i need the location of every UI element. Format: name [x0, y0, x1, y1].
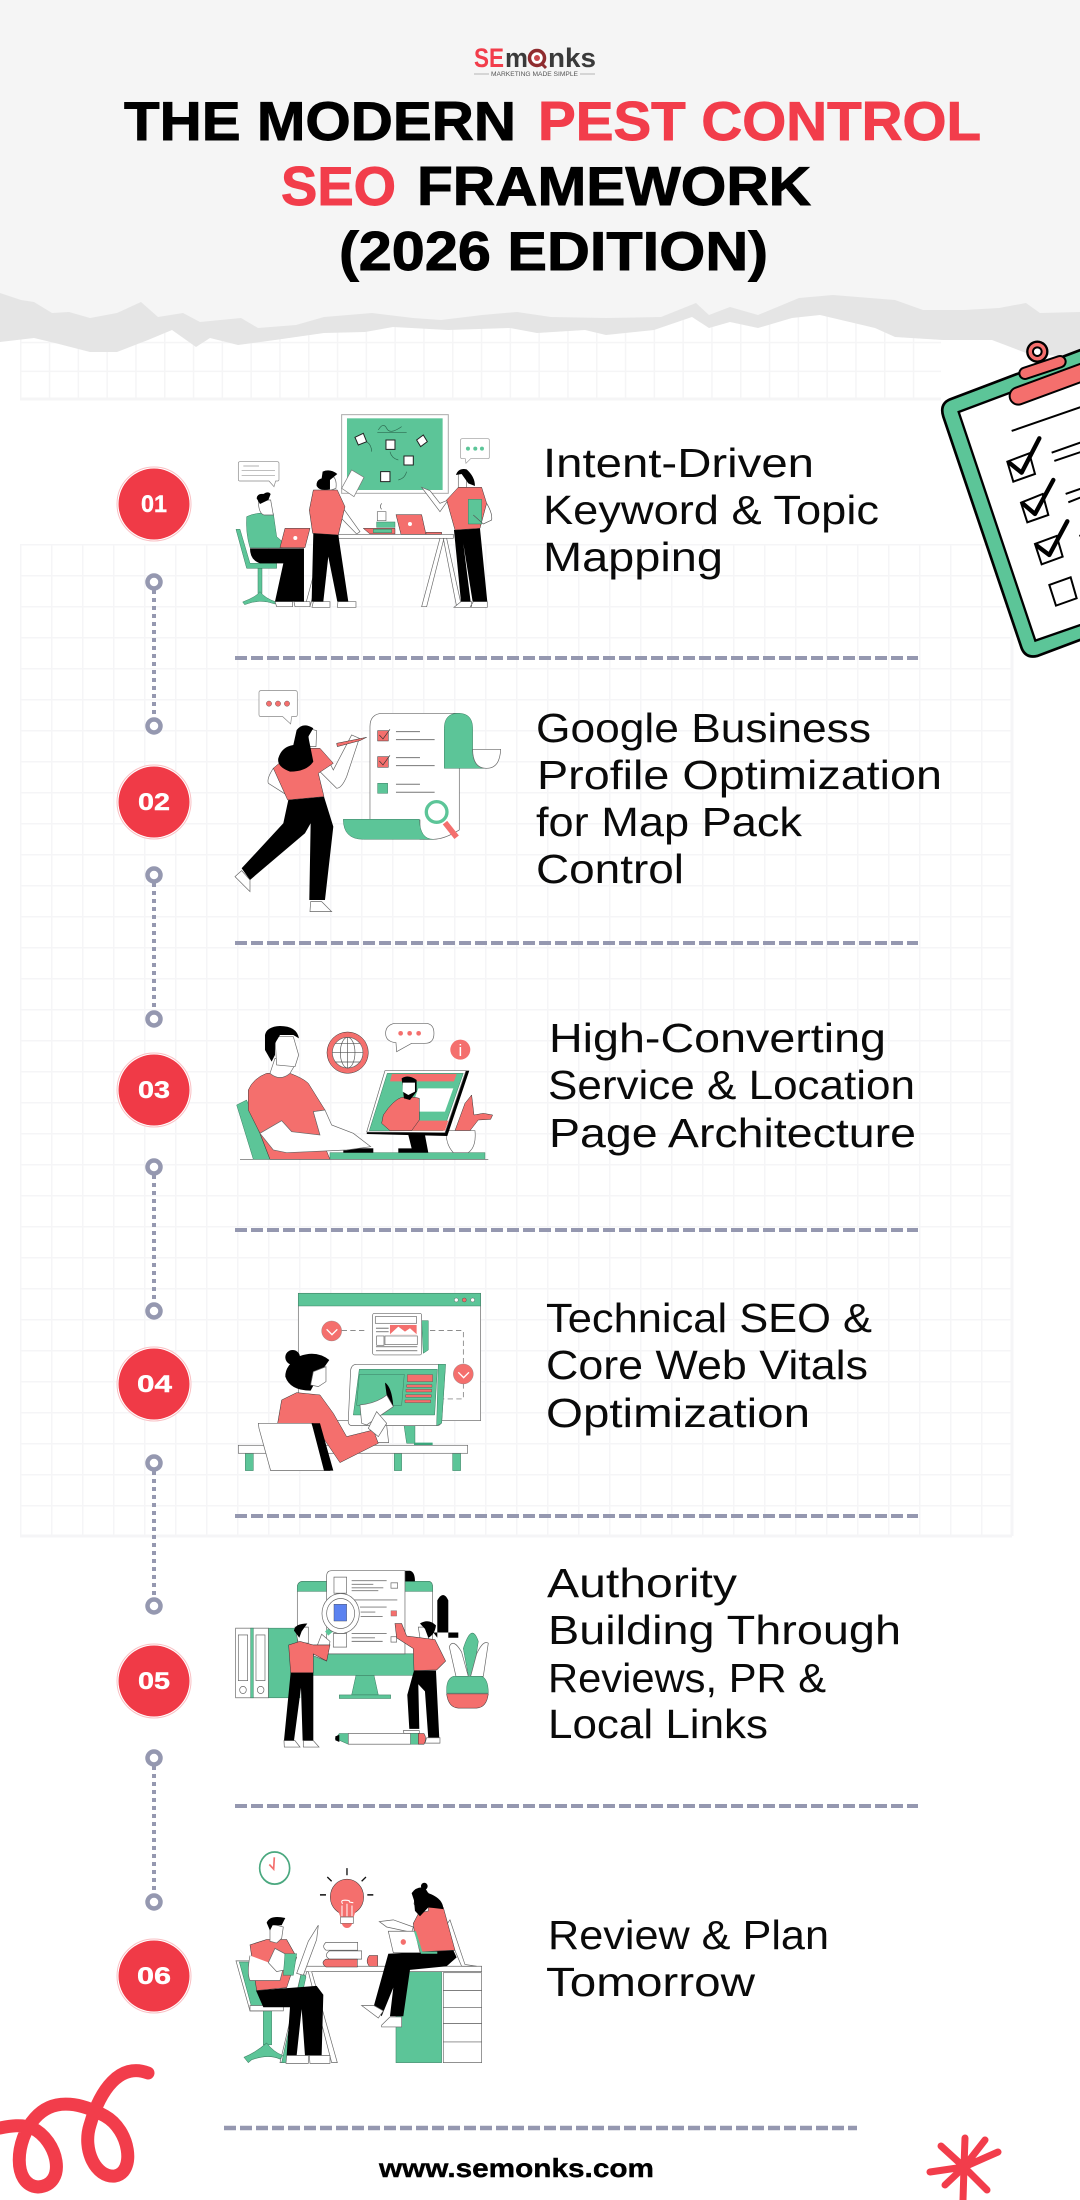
monitor — [367, 1071, 469, 1153]
badge 01: 01 — [141, 491, 167, 518]
illustration 3: man on video call — [237, 1023, 493, 1159]
text block 4: Core Web Vitals — [546, 1342, 868, 1388]
badge 03 — [117, 1053, 191, 1127]
speech bubble — [386, 1023, 434, 1052]
text block 1: Intent-Driven — [543, 440, 814, 486]
text block 3 — [548, 1015, 916, 1156]
man — [284, 1624, 330, 1747]
text block 5 — [547, 1560, 901, 1747]
text block 6: Tomorrow — [546, 1959, 756, 2005]
badge 04 — [117, 1347, 191, 1421]
checklist scroll — [343, 713, 501, 839]
woman — [235, 725, 367, 912]
globe — [327, 1032, 368, 1073]
logo: SEmonks: MARKETING MADE SIMPLE — [491, 71, 579, 78]
badge 05: 05 — [138, 1668, 170, 1695]
cabinet and table — [280, 1966, 482, 2063]
badge 04: 04 — [137, 1371, 173, 1398]
document with checklist — [327, 1571, 415, 1654]
light bulb — [320, 1868, 373, 1928]
logo: SEmonks — [474, 43, 596, 78]
text block 2: for Map Pack — [536, 799, 803, 845]
illustration 2: woman ticking checklist scroll — [235, 691, 501, 912]
badge 05 — [117, 1644, 191, 1718]
seated man with laptop — [236, 492, 310, 607]
badge 03: 03 — [138, 1077, 170, 1104]
decorative red asterisk — [930, 2138, 998, 2200]
magnifying glass — [322, 1594, 359, 1634]
timeline connector 4 — [148, 1456, 160, 1612]
text block 2: Profile Optimization — [537, 752, 942, 798]
illustration 5: team reviewing document on monitor — [236, 1571, 488, 1747]
books and mug — [323, 1942, 378, 1967]
binders — [236, 1628, 300, 1698]
woman — [395, 1621, 446, 1743]
standing woman — [309, 470, 360, 607]
title: SEO — [281, 155, 396, 217]
badge 06 — [117, 1939, 191, 2013]
illustration 6: two colleagues reviewing and planning — [236, 1852, 482, 2063]
man reading — [236, 1917, 330, 2063]
plant and black scroll — [433, 1595, 488, 1708]
text block 4: Technical SEO & — [546, 1295, 872, 1341]
badge 02: 02 — [138, 789, 170, 816]
illustration 4: woman designing web page — [238, 1293, 481, 1471]
text block 2: Google Business — [536, 705, 871, 751]
footer website: www.semonks.com — [378, 2153, 654, 2183]
clock — [260, 1852, 290, 1884]
info icon: i — [458, 1041, 462, 1060]
text block 2: Control — [536, 846, 684, 892]
text block 1: Keyword & Topic — [543, 487, 879, 533]
logo: SEmonks: nks — [548, 43, 596, 73]
text block 3: Service & Location — [548, 1062, 915, 1108]
text block 3: Page Architecture — [549, 1110, 916, 1156]
text block 1 — [543, 440, 879, 580]
monitor — [297, 1581, 433, 1698]
woman with green book — [422, 469, 492, 607]
browser window — [298, 1293, 481, 1421]
man at desk — [237, 1026, 371, 1159]
badge 01 — [117, 467, 191, 541]
text block 1: Mapping — [543, 534, 723, 580]
decorative red swirl — [0, 2071, 148, 2187]
illustration 1: team planning at a board — [236, 415, 492, 607]
timeline connector 2 — [148, 868, 160, 1026]
text block 2 — [536, 705, 942, 892]
logo: SEmonks: m — [505, 43, 528, 73]
title: PEST CONTROL — [538, 90, 981, 152]
title: THE MODERN — [124, 90, 516, 152]
text block 4 — [546, 1295, 872, 1436]
seated woman — [258, 1350, 387, 1471]
desk — [305, 503, 462, 607]
speech bubble — [259, 691, 297, 724]
text block 6: Review & Plan — [548, 1912, 829, 1958]
newspaper document — [373, 1313, 428, 1355]
text block 5: Building Through — [548, 1607, 901, 1653]
torn paper header band — [0, 0, 1080, 358]
desk — [240, 1148, 488, 1159]
plant — [446, 1095, 493, 1153]
monitor with layout — [348, 1364, 446, 1446]
text block 5: Local Links — [548, 1701, 768, 1747]
timeline connector 1 — [148, 576, 160, 732]
pencil — [335, 1733, 426, 1744]
text block 6 — [546, 1912, 829, 2005]
text block 4: Optimization — [546, 1390, 810, 1436]
speech bubbles — [238, 439, 489, 487]
badge 02 — [117, 765, 191, 839]
text block 3: High-Converting — [549, 1015, 886, 1061]
timeline connector 3 — [148, 1160, 160, 1318]
woman with laptop — [362, 1883, 477, 2027]
desk — [238, 1425, 468, 1471]
logo: SEmonks: SE — [474, 43, 504, 73]
badge 06: 06 — [137, 1963, 171, 1990]
icon: clipboard checklist — [942, 330, 1080, 657]
whiteboard — [342, 415, 448, 497]
info icon — [450, 1040, 470, 1060]
title: (2026 EDITION) — [339, 220, 768, 282]
text block 5: Authority — [547, 1560, 738, 1606]
title — [124, 90, 981, 282]
timeline connector 5 — [148, 1752, 160, 1908]
text block 5: Reviews, PR & — [548, 1655, 826, 1701]
title: FRAMEWORK — [417, 155, 811, 217]
